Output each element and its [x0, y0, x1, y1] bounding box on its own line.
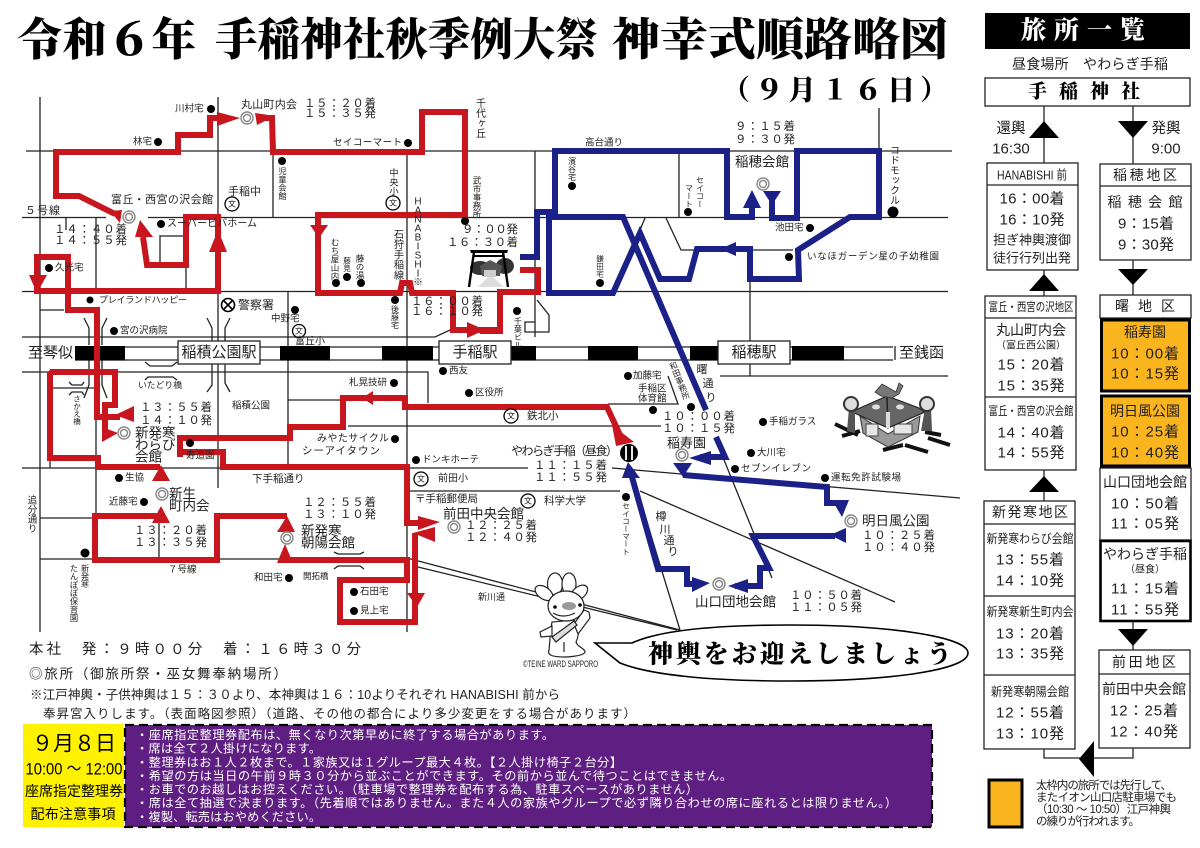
sidebar: 曙地区 header	[1100, 295, 1191, 318]
red route: return	[29, 112, 634, 622]
map time labels: １６：００着	[411, 294, 483, 308]
map place labels: 武市事務所	[472, 175, 482, 219]
map place labels: 高台通り	[585, 136, 623, 148]
panel: distribution notes: ・お車でのお越しはお控えください。（駐車場で整理券を配布する為、駐車スペースがありません）	[136, 782, 698, 796]
panel: distribution notes: ・希望の方は当日の午前９時３０分から並ぶことができます。その前から並んで待つことはできません。	[136, 768, 732, 783]
map place labels: 〒手稲郵便局	[415, 492, 478, 505]
panel: distribution notes: ・整理券はお１人２枚まで。１家族又は１グループ最大４枚。【２人掛け椅子２台分】	[136, 754, 622, 770]
sidebar: 富丘・西宮の沢地区 box: 富丘・西宮の沢地区	[988, 299, 1074, 314]
icon: police station	[222, 298, 234, 312]
sidebar: やわらぎ手稲 box: 11：55発	[1111, 602, 1179, 618]
map place labels: 至琴似	[28, 344, 73, 362]
school marker glyphs	[228, 198, 532, 506]
sidebar: 新発寒地区 box: 13：20着	[996, 626, 1064, 642]
sidebar: departure label: 9:00	[1151, 140, 1181, 158]
panel: ticket date: 10:00 ～ 12:00	[26, 760, 122, 778]
HANABISHI vertical label: A	[415, 206, 422, 216]
landmark dots	[45, 105, 898, 615]
map place labels: 石田宅	[360, 586, 389, 598]
map place labels: セイコーマート	[333, 138, 402, 148]
map place labels: 寿造園	[186, 450, 215, 462]
map place labels: 新川通	[478, 592, 505, 602]
sidebar: HANABISHI box: 担ぎ神輿渡御	[993, 232, 1071, 248]
sidebar: 新発寒地区 box: 新発寒新生町内会	[986, 605, 1074, 619]
legend: otabisho: ◎旅所（御旅所祭・巫女舞奉納場所）	[29, 666, 287, 682]
map place labels: 富丘・西宮の沢会館	[111, 192, 213, 206]
sidebar: 富丘・西宮の沢地区 box: 富丘・西宮の沢会館	[988, 403, 1074, 418]
map time labels: １２：２５着	[465, 518, 537, 532]
map place labels: 前田中央会館	[443, 506, 524, 522]
sidebar: 富丘・西宮の沢地区 box	[985, 296, 1076, 470]
sidebar: header	[985, 13, 1190, 49]
map place labels: 手稲中	[228, 184, 261, 198]
HANABISHI vertical label: B	[415, 232, 422, 244]
sidebar: HANABISHI box: 16：00着	[1000, 190, 1064, 208]
map place labels: やわらぎ手稲（昼食）	[511, 444, 618, 458]
school marker glyphs: 文	[507, 410, 515, 420]
sidebar: 新発寒地区 box: 新発寒朝陽会館	[991, 685, 1069, 699]
map place labels: 通	[702, 377, 714, 390]
map place labels: ７号線	[168, 564, 197, 576]
mascot character	[532, 573, 591, 657]
sidebar: 富丘・西宮の沢地区 box: （富丘西公園）	[996, 338, 1066, 352]
map place labels: 会館	[135, 450, 162, 464]
map time labels: ９：００発	[462, 222, 518, 236]
sidebar: 明日風公園 orange box: 10：25着	[1111, 424, 1179, 440]
map place labels: 池田宅	[775, 222, 804, 234]
sidebar: shrine box	[985, 78, 1190, 106]
map place labels: いなほガーデン星の子幼稚園	[807, 250, 939, 262]
sidebar: 新発寒地区 box: 13：10発	[996, 726, 1064, 742]
HANABISHI vertical label: A	[415, 224, 422, 234]
map place labels: 通	[664, 534, 674, 547]
sidebar: 新発寒地区 box: 12：55着	[996, 704, 1064, 722]
map place labels: 朝陽会館	[301, 536, 355, 550]
map place labels: 至銭函	[899, 344, 944, 362]
sidebar: connector lines and arrows	[1029, 106, 1148, 777]
station: 稲積公園駅: 稲積公園駅	[181, 344, 257, 361]
map place labels: セブンイレブン	[741, 462, 811, 474]
sidebar: 明日風公園 orange box: 明日風公園	[1110, 403, 1180, 419]
panel: distribution notes	[125, 725, 932, 827]
note text	[30, 687, 636, 721]
title	[17, 15, 948, 65]
sidebar: return label	[992, 120, 1030, 158]
map place labels: 開拓橋	[303, 571, 329, 581]
sidebar: 新発寒地区 box: 13：55着	[996, 552, 1064, 568]
map time labels: １０：５０着	[790, 588, 862, 602]
school marker glyphs: 文	[228, 198, 236, 208]
map place labels: みやたサイクル	[317, 432, 389, 444]
HANABISHI vertical label: I	[417, 268, 419, 280]
map time labels: １６：３０着	[447, 235, 518, 249]
map time labels: １２：４０発	[465, 530, 538, 544]
otabisho markers	[118, 112, 857, 590]
map place labels: 運転免許試験場	[831, 472, 901, 484]
map place labels: 中央小	[388, 167, 399, 196]
sidebar: 新発寒地区 box: 13：35発	[996, 646, 1064, 662]
map place labels: 川村宅	[175, 102, 204, 114]
map place labels: ５号線	[25, 204, 60, 217]
map place labels: 加藤宅	[633, 370, 662, 382]
callout speech bubble	[595, 625, 968, 681]
map place labels: 追分通り	[26, 494, 37, 533]
map time labels: １５：２０着	[304, 96, 376, 110]
sidebar: 新発寒地区 box: 14：10発	[996, 572, 1064, 590]
title: 手稲神社秋季例大祭	[215, 15, 598, 65]
sidebar: 稲寿園 orange box: 稲寿園	[1124, 324, 1166, 340]
map time labels: １１：１５着	[534, 458, 607, 472]
mikoshi body	[860, 416, 920, 447]
road network	[22, 97, 960, 632]
sidebar: 明日風公園 orange box: 10：40発	[1111, 444, 1179, 462]
map place labels: 町内会	[169, 498, 210, 514]
sidebar: 稲穂地区 box: 9：15着	[1118, 216, 1174, 232]
note text: 奉昇宮入りします。（表面略図参照）（道路、その他の都合により多少変更をする場合があります）	[43, 706, 636, 721]
map place labels: 大川宅	[757, 446, 786, 458]
map place labels: 西友	[449, 364, 469, 376]
icon: mikoshi portable shrine	[835, 383, 950, 452]
sidebar: 稲寿園 orange box: 10：15発	[1111, 366, 1179, 382]
sidebar: 新発寒地区 box: 新発寒地区	[992, 504, 1068, 520]
map place labels: シーアイタウン	[302, 445, 380, 457]
panel: distribution notes: ・座席指定整理券配布は、無くなり次第早めに終了する場合があります。	[136, 727, 554, 742]
sidebar: 前田地区 box: 前田中央会館	[1102, 681, 1186, 697]
mascot sash	[552, 621, 577, 642]
HANABISHI vertical label: H	[414, 260, 422, 270]
sidebar: return label: 16:30	[992, 140, 1030, 158]
school marker glyphs: 文	[524, 496, 532, 506]
sidebar: departure label: 発輿	[1152, 120, 1180, 137]
sidebar: 富丘・西宮の沢地区 box: 15：20着	[998, 356, 1064, 374]
HANABISHI vertical label: ※	[413, 278, 423, 288]
panel: ticket date: 座席指定整理券	[25, 783, 123, 799]
map place labels: プレイランドハッピー	[99, 295, 187, 305]
sidebar: 富丘・西宮の沢地区 box: 14：40着	[998, 424, 1064, 442]
map time labels: １５：３５発	[304, 106, 376, 120]
map place labels: 石狩手稲線	[392, 229, 404, 281]
sidebar: 前田地区 box	[1099, 650, 1190, 748]
map place labels: 稲積公園	[232, 400, 270, 412]
railway line	[75, 346, 893, 360]
sidebar: 前田地区 box: 12：40発	[1110, 724, 1178, 740]
school markers	[225, 196, 535, 508]
map place labels: ドンキホーテ	[422, 454, 479, 466]
sidebar: 富丘・西宮の沢地区 box: 15：35発	[998, 378, 1064, 394]
sidebar: return label: 還輿	[996, 120, 1026, 137]
map place labels: 前田小	[438, 472, 468, 484]
mascot fingers	[548, 573, 562, 595]
map place labels: 警察署	[238, 297, 274, 312]
map place labels: たんぽぽ保育園	[69, 564, 79, 623]
icon: shrine gate	[469, 250, 514, 287]
map place labels: コドモックル	[888, 145, 900, 205]
map place labels: 藤の湯	[355, 253, 365, 280]
map place labels: 児童会館	[278, 167, 287, 201]
panel: ticket date: 配布注意事項	[30, 806, 116, 822]
sidebar: やわらぎ手稲 box	[1100, 541, 1190, 621]
station: 稲積公園駅	[178, 341, 260, 364]
blue arrowheads	[622, 190, 849, 593]
map place labels: いたどり橋	[138, 379, 182, 390]
subtitle: date: （９月１６日）	[722, 74, 948, 106]
map place labels: 和田宅	[254, 572, 283, 584]
map place labels: 近藤宅	[109, 496, 138, 508]
map place labels: 富丘小	[295, 334, 325, 348]
mascot body and legs	[549, 620, 585, 657]
HANABISHI vertical label: H	[414, 196, 422, 208]
map place labels: り	[668, 545, 678, 558]
sidebar: HANABISHI box: HANABISHI 前	[997, 168, 1067, 182]
map place labels: 下手稲通り	[252, 472, 304, 485]
map place labels: 新発寒	[80, 564, 90, 589]
map time labels: １０：００着	[662, 409, 735, 423]
mascot credit: ©TEINE WARD SAPPORO	[523, 659, 598, 669]
station: 稲穂駅: 稲穂駅	[731, 344, 777, 361]
map place labels: わらび	[135, 438, 176, 452]
map place labels: スーパービバホーム	[167, 218, 257, 230]
sidebar: HANABISHI box: 徒行行列出発	[993, 250, 1071, 266]
map time labels: １３：３５発	[134, 535, 208, 549]
map place labels: 生協	[125, 472, 144, 484]
sidebar: 山口団地会館 box: 11：05発	[1111, 516, 1179, 532]
map place labels: 宮の沢病院	[120, 324, 168, 336]
sidebar: やわらぎ手稲 box: やわらぎ手稲	[1103, 546, 1187, 562]
map place labels: 藤見	[342, 256, 352, 273]
sidebar: 山口団地会館 box	[1100, 468, 1191, 540]
map time labels: １６：１０発	[411, 304, 484, 318]
map time labels: １０：４０発	[862, 540, 936, 554]
map place labels: 科学大学	[544, 494, 586, 507]
legend: orange box	[989, 780, 1022, 827]
school marker glyphs: 文	[295, 326, 303, 336]
mikoshi carrying poles	[835, 424, 950, 452]
map place labels: 曙	[696, 363, 708, 376]
map place labels: 林宅	[133, 136, 152, 148]
map place labels: 札晃技研	[349, 376, 388, 388]
sidebar: HANABISHI box	[987, 163, 1078, 270]
red arrowheads	[29, 112, 634, 607]
map time labels: １１：５５発	[534, 470, 608, 484]
map time labels: ９：１５着	[735, 119, 795, 133]
title: 神幸式順路略図	[612, 15, 948, 65]
map place labels: 丸山町内会	[241, 97, 297, 111]
map place labels: り	[706, 391, 716, 404]
map place labels: 後藤宅	[390, 304, 400, 329]
sidebar: 稲穂地区 box: 稲穂地区	[1113, 167, 1177, 183]
school marker glyphs: 文	[417, 474, 425, 484]
map place labels: 鉄北小	[527, 409, 559, 422]
map place labels: 千葉ビル	[514, 316, 522, 349]
blue route: departure	[520, 151, 879, 593]
map place labels: マート	[684, 184, 694, 208]
map place labels: 川	[660, 524, 670, 536]
map time labels: １３：２０着	[134, 523, 207, 537]
panel: distribution notes: ・席は全て２人掛けになります。	[136, 740, 321, 756]
mikoshi phoenix	[875, 383, 903, 398]
sidebar: 新発寒地区 box: 新発寒わらび会館	[986, 532, 1074, 546]
sidebar: 稲穂地区 box: 稲穂会館	[1108, 194, 1182, 210]
mascot face	[548, 591, 584, 621]
legend: note text: （10:30 ～ 10:50）江戸神輿	[1036, 802, 1172, 816]
map time labels: １２：５５着	[303, 495, 376, 509]
map place labels: さかえ橋	[72, 395, 82, 426]
station: 手稲駅: 手稲駅	[452, 344, 498, 361]
map time labels	[54, 96, 936, 614]
panel: ticket date: ９月８日	[32, 732, 116, 756]
map place labels: 新発寒	[135, 426, 176, 440]
sidebar: 新発寒地区 box	[984, 501, 1075, 749]
note text: ※江戸神輿・子供神輿は１５：３０より、本神輿は１６：10よりそれぞれ HANABISHI 前から	[30, 687, 560, 702]
map place labels: 稲寿園	[667, 436, 706, 450]
station: 稲穂駅	[718, 341, 790, 364]
HANABISHI vertical label: S	[415, 250, 422, 262]
map place labels: 千代ヶ丘	[474, 98, 486, 138]
map time labels: １０：２５着	[862, 528, 935, 542]
station: 手稲駅	[439, 341, 511, 364]
legend: note text: 太枠内の旅所では先行して、	[1036, 778, 1172, 792]
sidebar: 稲寿園 orange box: 10：00着	[1111, 346, 1179, 362]
sidebar: HANABISHI box: 16：10発	[1000, 212, 1064, 228]
sidebar: やわらぎ手稲 box: （昼食）	[1125, 564, 1165, 576]
sidebar: 稲穂地区 box: 9：30発	[1118, 236, 1174, 254]
map place labels: 新生	[169, 486, 196, 502]
map place labels: 和田事務所	[668, 360, 692, 402]
HANABISHI vertical label: N	[414, 214, 422, 226]
sidebar: 稲穂地区 box	[1100, 164, 1191, 260]
panel: distribution notes: ・席は全て抽選で決まります。（先着順ではありません。また４人の家族やグループで必ず隣り合わせの席に座れるとは限りません。）	[136, 795, 897, 810]
panel: distribution notes: ・複製、転売はおやめください。	[136, 809, 321, 824]
panel: ticket date	[23, 724, 124, 827]
map time labels: １４：１０発	[140, 413, 212, 427]
HANABISHI vertical label: I	[417, 242, 419, 252]
sidebar: 稲寿園 orange box	[1102, 320, 1190, 391]
map place labels: 見上宅	[360, 606, 389, 616]
map place labels: むち屋山内	[330, 238, 340, 281]
legend: note text	[1036, 778, 1177, 828]
legend: note text: またイオン山口店駐車場でも	[1036, 790, 1177, 804]
map time labels: １０：１５発	[662, 421, 736, 435]
callout speech bubble: 神輿をお迎えしましょう	[648, 640, 952, 668]
map place labels: 久光宅	[55, 262, 84, 274]
map place labels: 新発寒	[301, 524, 342, 538]
map place labels: 鎌田宅	[595, 254, 604, 278]
map time labels: １４：５５発	[54, 233, 128, 247]
map time labels: ９：３０発	[735, 132, 796, 146]
sidebar: lunch place: 昼食場所 やわらぎ手稲	[1012, 56, 1168, 72]
map place labels: セイコー	[696, 176, 704, 208]
map place labels: 山口団地会館	[695, 594, 776, 610]
sidebar: departure label	[1151, 120, 1181, 158]
sidebar: 山口団地会館 box: 山口団地会館	[1103, 474, 1187, 490]
map place labels: 手稲区	[638, 382, 667, 394]
map place labels	[25, 97, 944, 623]
sidebar: やわらぎ手稲 box: 11：15着	[1111, 580, 1179, 598]
map place labels: 明日風公園	[862, 514, 930, 528]
sidebar: 山口団地会館 box: 10：50着	[1111, 496, 1179, 512]
school marker glyphs: 文	[389, 198, 397, 208]
map time labels: １４：４０着	[54, 222, 127, 236]
map time labels: １１：０５発	[790, 600, 862, 614]
sidebar: 曙地区 header: 曙 地 区	[1115, 298, 1175, 314]
sidebar: 富丘・西宮の沢地区 box: 丸山町内会	[996, 322, 1066, 338]
legend: note text: の練りが行われます。	[1036, 814, 1140, 828]
mikoshi lanterns	[847, 408, 932, 433]
map place labels: 中野宅	[271, 312, 300, 324]
sidebar: 富丘・西宮の沢地区 box: 14：55発	[998, 444, 1064, 462]
map place labels: 体育館	[638, 392, 667, 404]
mikoshi roof	[852, 396, 925, 428]
title: 令和６年	[17, 15, 196, 65]
mascot arms	[574, 610, 590, 634]
sidebar: 明日風公園 orange box	[1102, 396, 1190, 466]
map time labels: １３：５５着	[140, 400, 212, 414]
sidebar: shrine box: 手稲神社	[1028, 80, 1140, 102]
icon: lunch fork and knife	[620, 444, 638, 462]
map place labels: 樽	[656, 509, 666, 523]
map place labels: 稲穂会館	[735, 154, 789, 170]
HANABISHI vertical label	[413, 196, 423, 288]
map place labels: 区役所	[475, 386, 504, 398]
sidebar: 前田地区 box: 前田地区	[1112, 654, 1176, 670]
sidebar: 前田地区 box: 12：25着	[1110, 702, 1178, 720]
map time labels: １３：１０発	[303, 507, 376, 521]
map place labels: 濱谷宅	[568, 156, 576, 181]
sidebar: header: 旅所一覧	[1021, 16, 1145, 44]
map place labels: 手稲ガラス	[769, 416, 816, 428]
schedule note: 本社 発：９時００分 着：１６時３０分	[29, 641, 362, 658]
map place labels: セイコーマート	[622, 502, 630, 555]
